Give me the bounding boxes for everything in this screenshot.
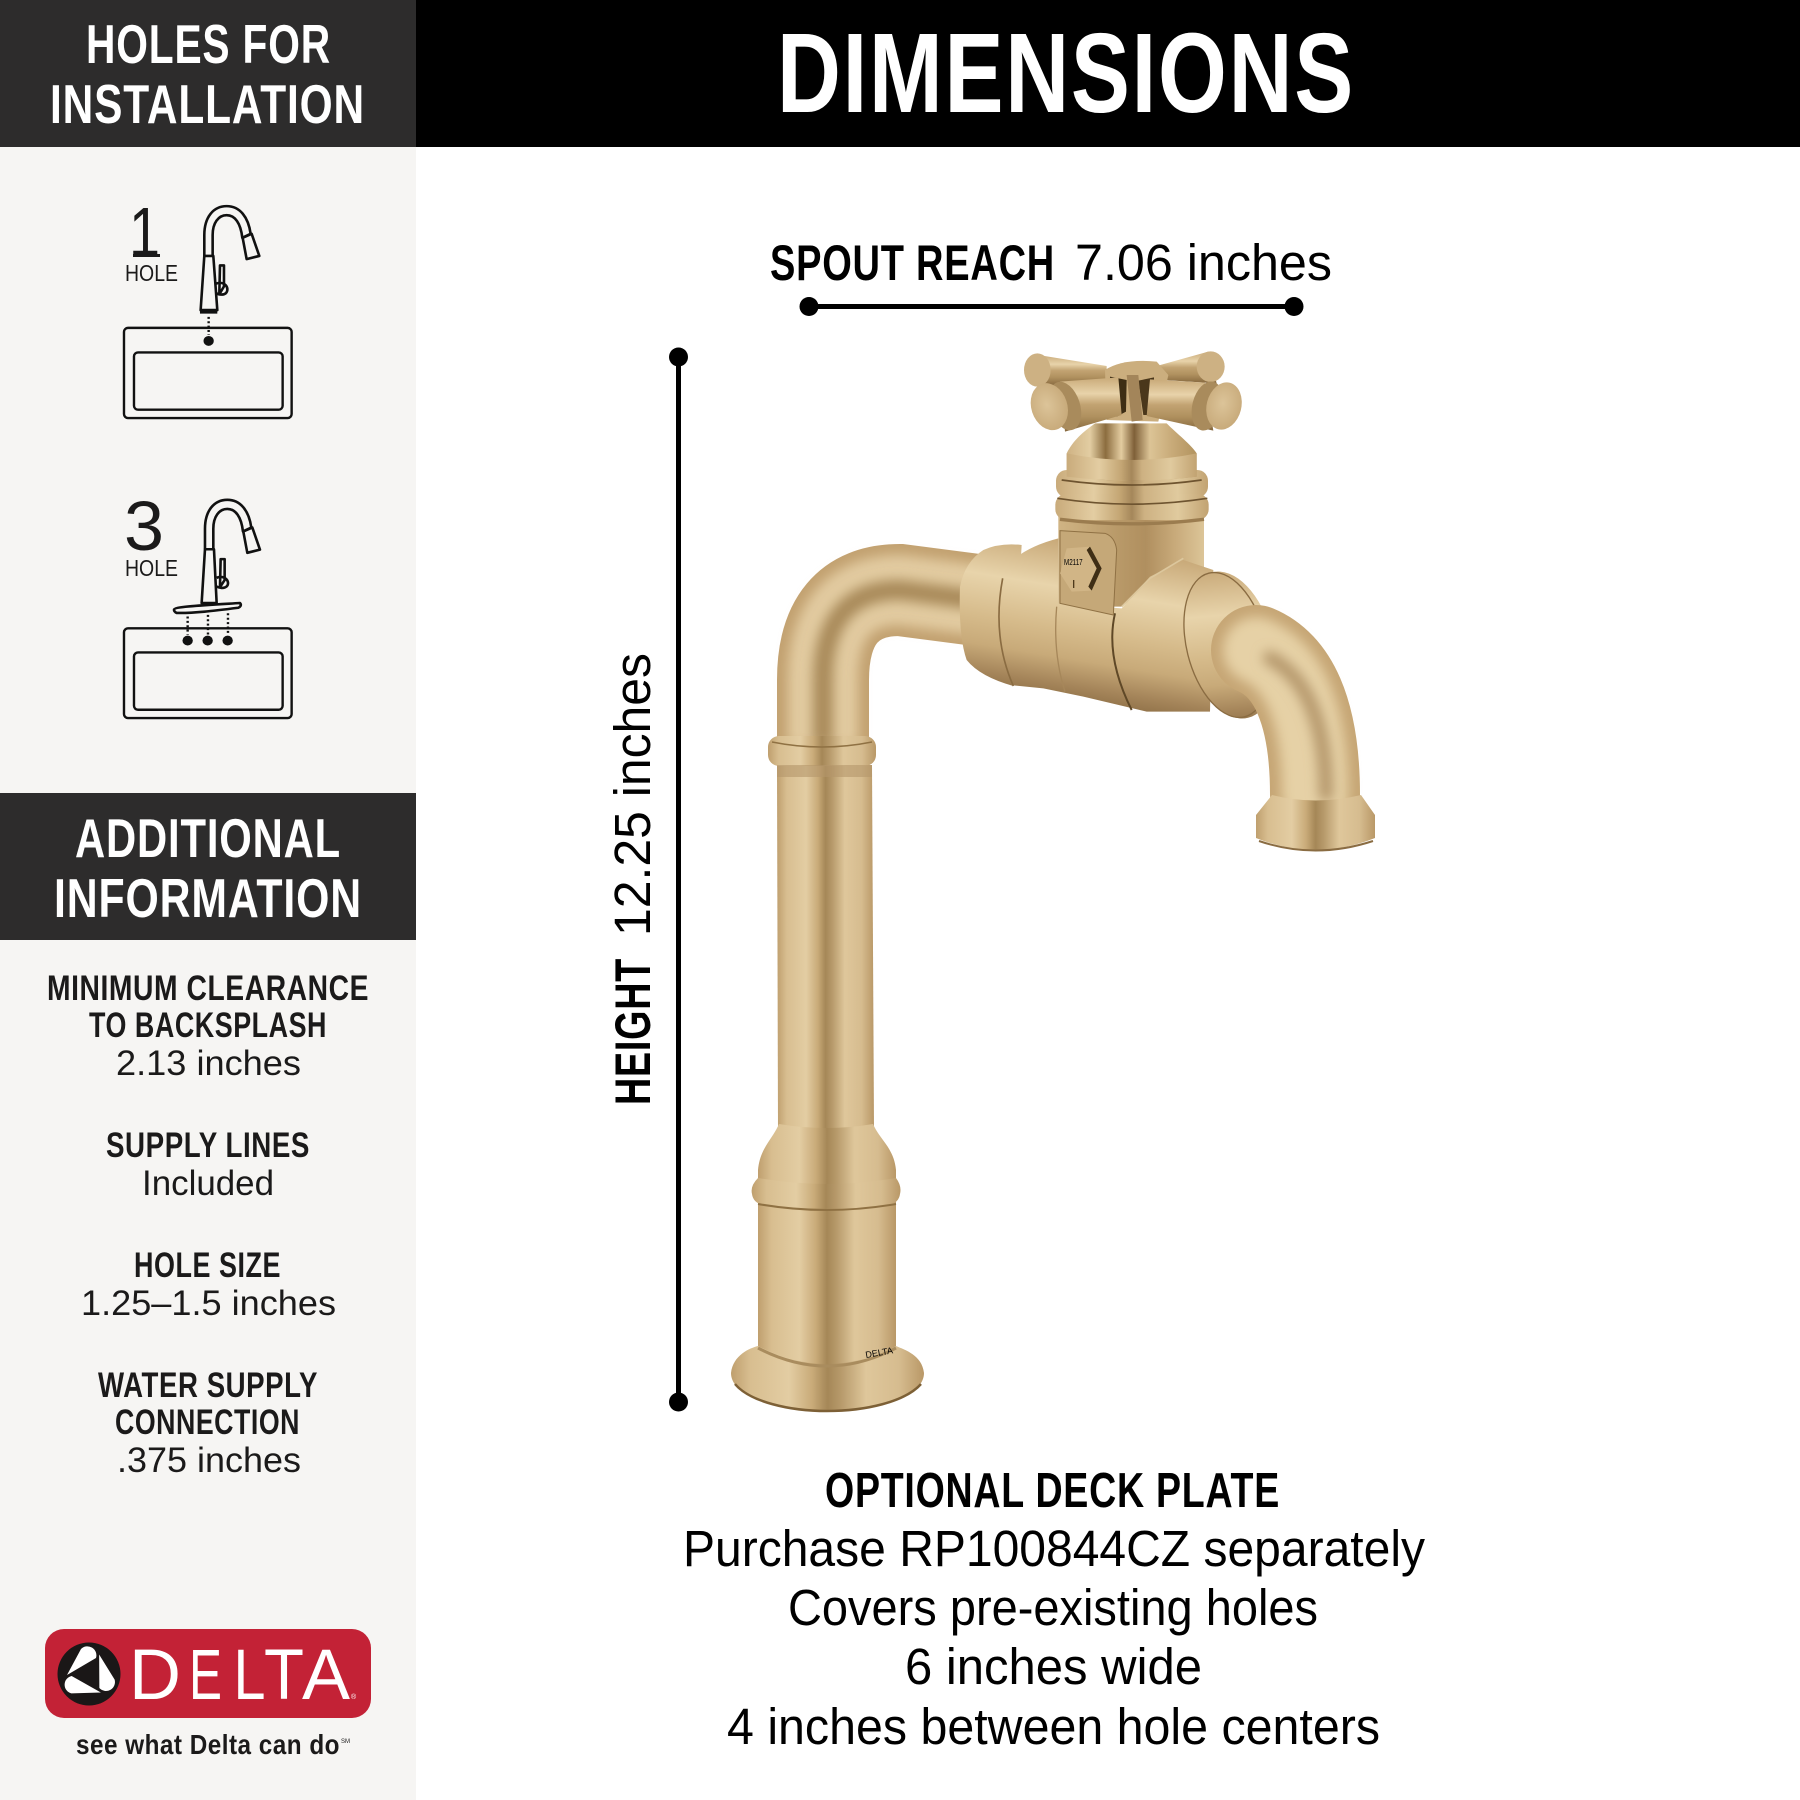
text block: hole size <box>81 1246 336 1323</box>
label: spout reach: 7.06 inches <box>1075 234 1332 291</box>
text block: optional deck plate: Purchase RP100844CZ separately <box>683 1520 1425 1577</box>
text block: optional deck plate: 4 inches between hole centers <box>727 1698 1380 1755</box>
faucet flare <box>758 1124 896 1192</box>
faucet lower body <box>758 1200 896 1368</box>
arrow: height dimension line <box>669 348 688 1412</box>
faucet elbow pipe <box>823 590 1000 745</box>
product photo: faucet <box>731 351 1375 1411</box>
faucet collar ring <box>752 1178 900 1210</box>
text block: hole size: HOLE SIZE <box>134 1246 281 1285</box>
heading: additional information <box>0 793 416 940</box>
icon: three hole sink: HOLE <box>125 555 178 581</box>
label: height <box>604 653 661 1105</box>
label: height: HEIGHT <box>605 958 661 1105</box>
sidebar panel <box>0 0 416 1800</box>
valve neck <box>1058 515 1204 607</box>
icon: three hole sink: 3 <box>124 487 164 565</box>
logo: delta <box>45 1629 371 1760</box>
logo: delta: E <box>189 1636 222 1715</box>
text block: hole size: 1.25–1.5 inches <box>81 1284 336 1323</box>
text block: supply lines <box>106 1126 310 1203</box>
text block: water supply connection: WATER SUPPLY <box>98 1366 318 1405</box>
logo: delta: L <box>234 1636 266 1715</box>
icon: one hole sink: HOLE <box>125 260 178 286</box>
outlet tube <box>1256 650 1326 795</box>
outlet flange <box>1170 562 1290 728</box>
handle back arms <box>1024 351 1225 387</box>
text block: optional deck plate: 6 inches wide <box>905 1638 1202 1695</box>
logo: delta: see what Delta can do <box>76 1729 340 1760</box>
logo: delta: A <box>302 1636 351 1715</box>
icon: one hole sink: 1 <box>129 193 160 271</box>
cylinder seams <box>999 558 1183 710</box>
faucet base flange <box>731 1345 924 1411</box>
bolt: M2117 <box>1064 557 1083 567</box>
bolt <box>1060 547 1102 592</box>
text block: water supply connection: .375 inches <box>117 1441 301 1480</box>
valve left collar <box>960 544 1022 686</box>
heading: holes for installation <box>0 0 416 147</box>
label: height: 12.25 inches <box>604 653 661 936</box>
logo: delta: ® <box>351 1693 357 1701</box>
label: spout reach <box>770 234 1332 291</box>
dome band <box>1067 453 1197 481</box>
faucet base flange: DELTA <box>865 1345 894 1360</box>
text block: optional deck plate: Covers pre-existing holes <box>788 1579 1318 1636</box>
label: spout reach: SPOUT REACH <box>770 235 1055 291</box>
title: dimensions: DIMENSIONS <box>777 10 1355 136</box>
handle front arms <box>1025 377 1247 435</box>
heading: additional information: INFORMATION <box>54 867 362 929</box>
faucet upper ring <box>768 736 876 777</box>
title: dimensions <box>416 0 1800 147</box>
text block: water supply connection <box>98 1366 318 1480</box>
valve cylinder <box>997 538 1213 712</box>
text block: minimum clearance: TO BACKSPLASH <box>89 1006 327 1045</box>
text block: optional deck plate <box>683 1464 1425 1755</box>
text block: optional deck plate: OPTIONAL DECK PLATE <box>825 1464 1280 1518</box>
text block: water supply connection: CONNECTION <box>115 1403 300 1442</box>
logo: delta: T <box>264 1636 304 1715</box>
text block: supply lines: SUPPLY LINES <box>106 1126 310 1165</box>
valve dome <box>1067 423 1197 481</box>
text block: supply lines: Included <box>142 1164 274 1203</box>
spout tip <box>1256 795 1375 850</box>
heading: holes for installation: HOLES FOR <box>86 13 331 75</box>
heading: additional information: ADDITIONAL <box>75 807 341 869</box>
text block: minimum clearance: MINIMUM CLEARANCE <box>47 969 369 1008</box>
logo: delta: D <box>129 1636 181 1715</box>
text block: minimum clearance <box>47 969 369 1083</box>
valve assembly <box>960 351 1290 728</box>
valve rings <box>1055 470 1209 524</box>
text block: minimum clearance: 2.13 inches <box>116 1044 301 1083</box>
logo: delta: SM <box>341 1739 350 1745</box>
handle hub <box>1105 361 1168 422</box>
heading: holes for installation: INSTALLATION <box>50 73 365 135</box>
arrow: spout reach dimension line <box>800 297 1304 316</box>
icon: one hole sink <box>124 193 292 418</box>
faucet column <box>777 765 874 1130</box>
icon: three hole sink <box>124 487 292 718</box>
bolt plate <box>1060 531 1117 615</box>
